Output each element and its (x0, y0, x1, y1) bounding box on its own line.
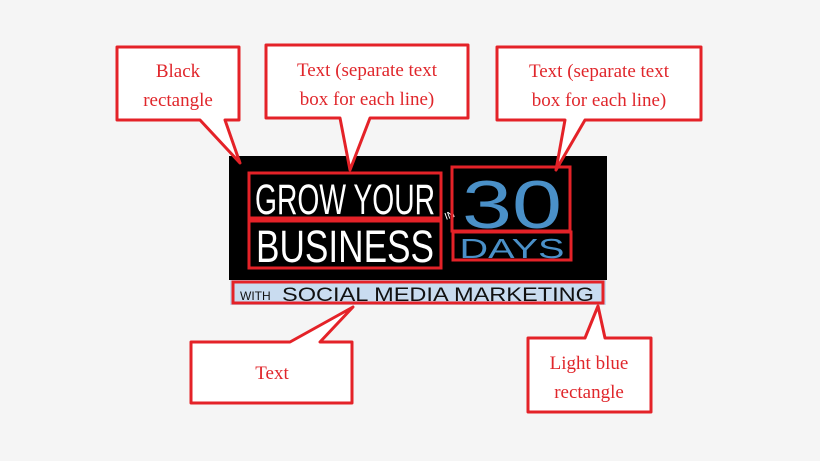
callout: light blue rectangle: rectangle (554, 382, 624, 403)
headline: GROW YOUR: GROW YOUR (255, 176, 435, 224)
headline: BUSINESS: BUSINESS (256, 221, 434, 272)
callout: text top: Text (separate text (297, 60, 438, 81)
callout: text top (266, 45, 468, 170)
callout: text top: box for each line) (300, 89, 434, 110)
text: DAYS (453, 232, 571, 264)
callout: light blue rectangle (528, 306, 651, 412)
callout: black rectangle: Black (156, 61, 201, 82)
callout: black rectangle (117, 47, 240, 163)
text: with social media marketing (233, 282, 603, 306)
text: with social media marketing: WITH (240, 289, 271, 303)
callout: light blue rectangle: Light blue (550, 353, 628, 374)
callout: text right: box for each line) (532, 90, 666, 111)
callout: text right (497, 47, 701, 170)
black rectangle (229, 156, 607, 280)
text: IN: IN (443, 209, 456, 223)
callout: text bottom: Text (255, 363, 289, 384)
text: 30: 30 (462, 167, 562, 243)
callout: text right: Text (separate text (529, 61, 670, 82)
callout: black rectangle: rectangle (143, 90, 213, 111)
callout: text bottom (191, 307, 353, 403)
text: DAYS: DAYS (460, 233, 564, 264)
headline: GROW YOUR (249, 173, 441, 224)
text: with social media marketing: SOCIAL MEDIA MARKETING (282, 285, 594, 306)
text: 30 (452, 167, 570, 243)
light blue rectangle (230, 280, 606, 305)
